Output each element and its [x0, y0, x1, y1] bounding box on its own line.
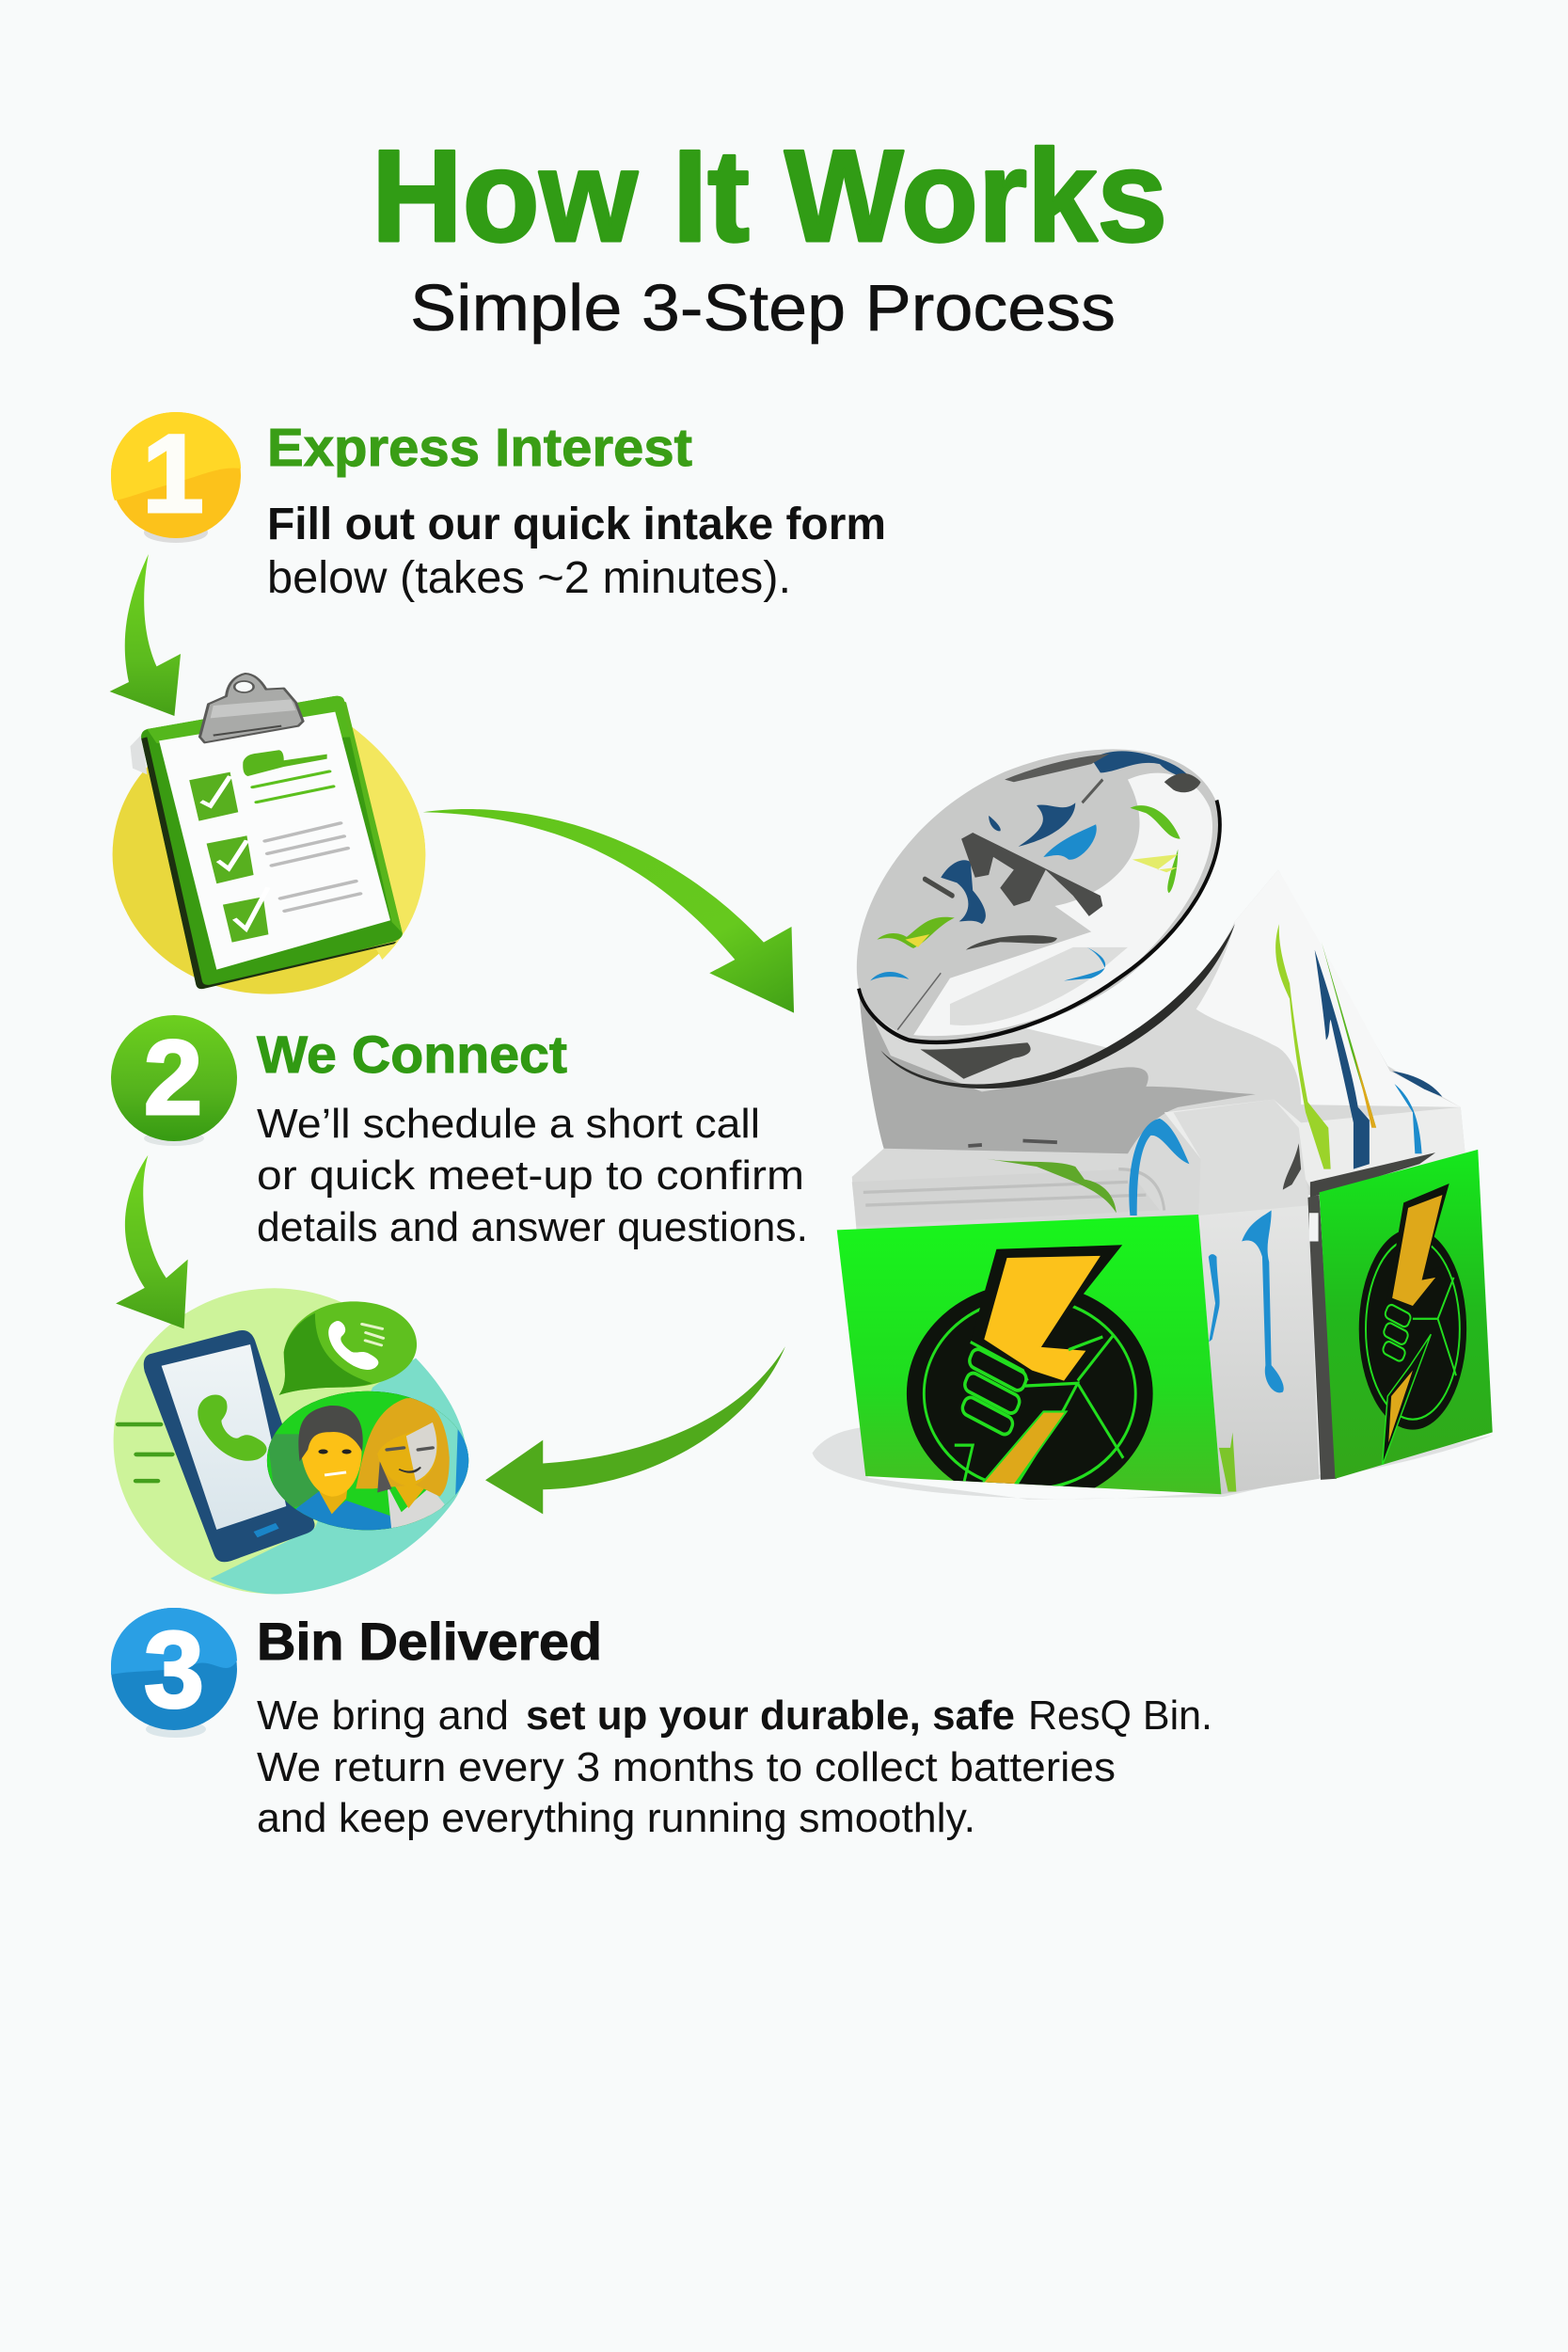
step 2 text — [257, 1101, 808, 1250]
step 2 badge: 2 — [144, 1019, 202, 1136]
paint drips — [987, 924, 1442, 1491]
ground shadow — [813, 1427, 1494, 1500]
metal clip — [199, 674, 303, 742]
arrow: step 1 to clipboard — [110, 554, 181, 716]
front green panel with logo — [837, 1215, 1221, 1504]
woman hair — [356, 1398, 450, 1497]
step 3 badge: 3 — [144, 1610, 204, 1730]
step 3 text: ResQ Bin. — [1028, 1692, 1212, 1739]
step 1 badge: 1 — [142, 412, 204, 536]
step 2 text: We’ll schedule a short call — [257, 1101, 760, 1147]
step 1 badge — [111, 412, 241, 543]
step 3 text: We bring and — [257, 1692, 509, 1739]
checklist row 3 — [223, 882, 360, 943]
arrow: step 2 to phone — [116, 1155, 188, 1328]
checklist row 2 — [207, 823, 348, 883]
step 1 heading: Express Interest — [267, 418, 692, 478]
arrow: clipboard to bin — [423, 809, 794, 1013]
step 2 heading: We Connect — [257, 1025, 567, 1084]
lid paint splatter — [870, 751, 1201, 980]
man head — [300, 1429, 361, 1497]
step 1 text — [267, 500, 886, 603]
title: How It Works — [372, 123, 1167, 269]
step 3 text: set up your durable, safe — [526, 1692, 1015, 1739]
ResQ bin illustration — [813, 749, 1494, 1504]
yellow circle — [113, 715, 425, 994]
phone — [144, 1330, 315, 1562]
step 3 text: We return every 3 months to collect batteries — [257, 1744, 1116, 1790]
woman body — [388, 1489, 444, 1528]
lime blob — [114, 1288, 435, 1594]
lid — [857, 749, 1235, 1089]
lid handle — [961, 833, 1102, 916]
phone call illustration — [114, 1288, 473, 1594]
step 1 text: below (takes ~2 minutes). — [267, 553, 791, 603]
clipboard illustration — [113, 674, 425, 994]
step 3 text — [257, 1692, 1212, 1841]
step 2 badge — [111, 1015, 237, 1146]
checklist row 1 — [189, 750, 333, 821]
portrait circle: two people — [267, 1390, 473, 1533]
step 3 badge — [111, 1608, 237, 1738]
motion lines — [119, 1424, 172, 1481]
arrow: bin to phone — [485, 1346, 785, 1514]
bin body — [852, 870, 1465, 1494]
step 3 heading: Bin Delivered — [257, 1612, 602, 1671]
subtitle: Simple 3-Step Process — [410, 271, 1116, 344]
speech bubble with handset — [279, 1301, 417, 1395]
teal blob — [211, 1359, 467, 1594]
step 2 text: or quick meet-up to confirm — [257, 1152, 804, 1199]
man shirt — [295, 1491, 397, 1530]
step 1 text: Fill out our quick intake form — [267, 500, 886, 549]
step 2 text: details and answer questions. — [257, 1204, 808, 1250]
step 3 text: and keep everything running smoothly. — [257, 1795, 975, 1841]
clipboard board — [141, 696, 403, 989]
right green panel with logo — [1320, 1150, 1493, 1479]
paper — [159, 712, 390, 970]
